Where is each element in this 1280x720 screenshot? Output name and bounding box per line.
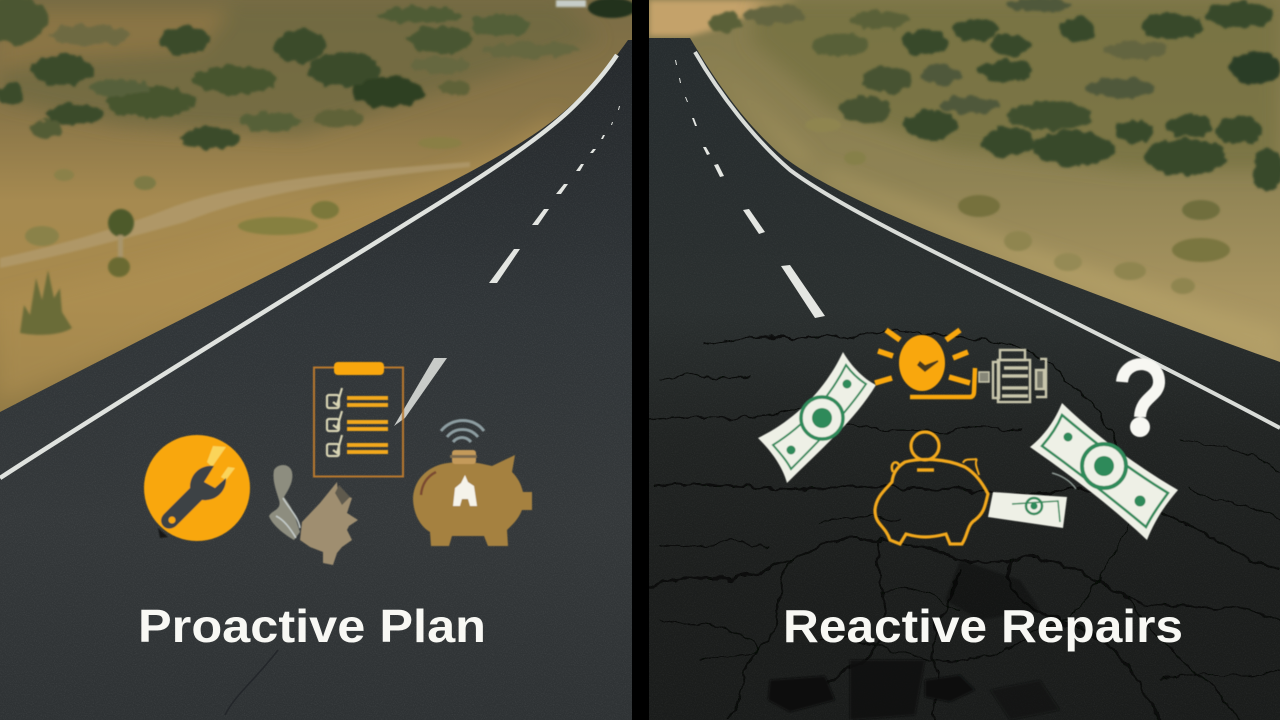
dirt path	[0, 162, 470, 268]
road edge line	[0, 55, 617, 478]
light rays	[875, 330, 970, 383]
pavement cracks	[649, 332, 1280, 720]
icon: outlined piggy bank with coin	[875, 432, 988, 544]
hillside shading	[700, 0, 1280, 362]
divider between panels	[632, 0, 649, 720]
road edge line	[695, 52, 1280, 428]
road surface	[0, 40, 632, 720]
wifi arcs	[441, 420, 484, 442]
roadside shrubs	[20, 137, 462, 335]
far hill and tan slope	[649, 0, 800, 36]
sky and far trees	[556, 0, 636, 18]
dark pothole patches	[768, 560, 1060, 720]
asphalt grain	[0, 40, 632, 720]
checkbox rows	[327, 388, 342, 456]
centre dashes	[394, 106, 620, 426]
icon: question mark	[1122, 364, 1159, 437]
heading: proactive plan: Proactive Plan	[138, 600, 486, 652]
panel: proactive plan, smooth road	[0, 0, 636, 720]
icon: smoke and burst	[269, 465, 358, 565]
icon: dollar bill in piggy slot	[988, 492, 1067, 528]
icon: wrench in orange circle	[144, 435, 250, 541]
hillside shading	[0, 0, 600, 400]
panel: reactive repairs, cracked road	[649, 0, 1280, 720]
icon: machine gear	[979, 350, 1046, 402]
road surface	[649, 38, 1280, 720]
icon: brown piggy bank with wifi	[413, 420, 532, 546]
heading: reactive repairs: Reactive Repairs	[783, 600, 1183, 652]
icon: checklist clipboard	[314, 362, 403, 476]
bushes on right hillside	[710, 0, 1280, 191]
icon: warning bulb with check mark	[875, 330, 975, 397]
checklist lines	[347, 396, 388, 454]
asphalt grain	[649, 38, 1280, 720]
icon: dollar bill, left	[758, 352, 876, 483]
roadside shrubs	[805, 118, 1230, 294]
icon: dollar bill, right	[1030, 403, 1178, 540]
centre dashes	[675, 60, 825, 318]
bushes on left hillside	[0, 0, 580, 149]
faint road wear	[225, 650, 278, 715]
